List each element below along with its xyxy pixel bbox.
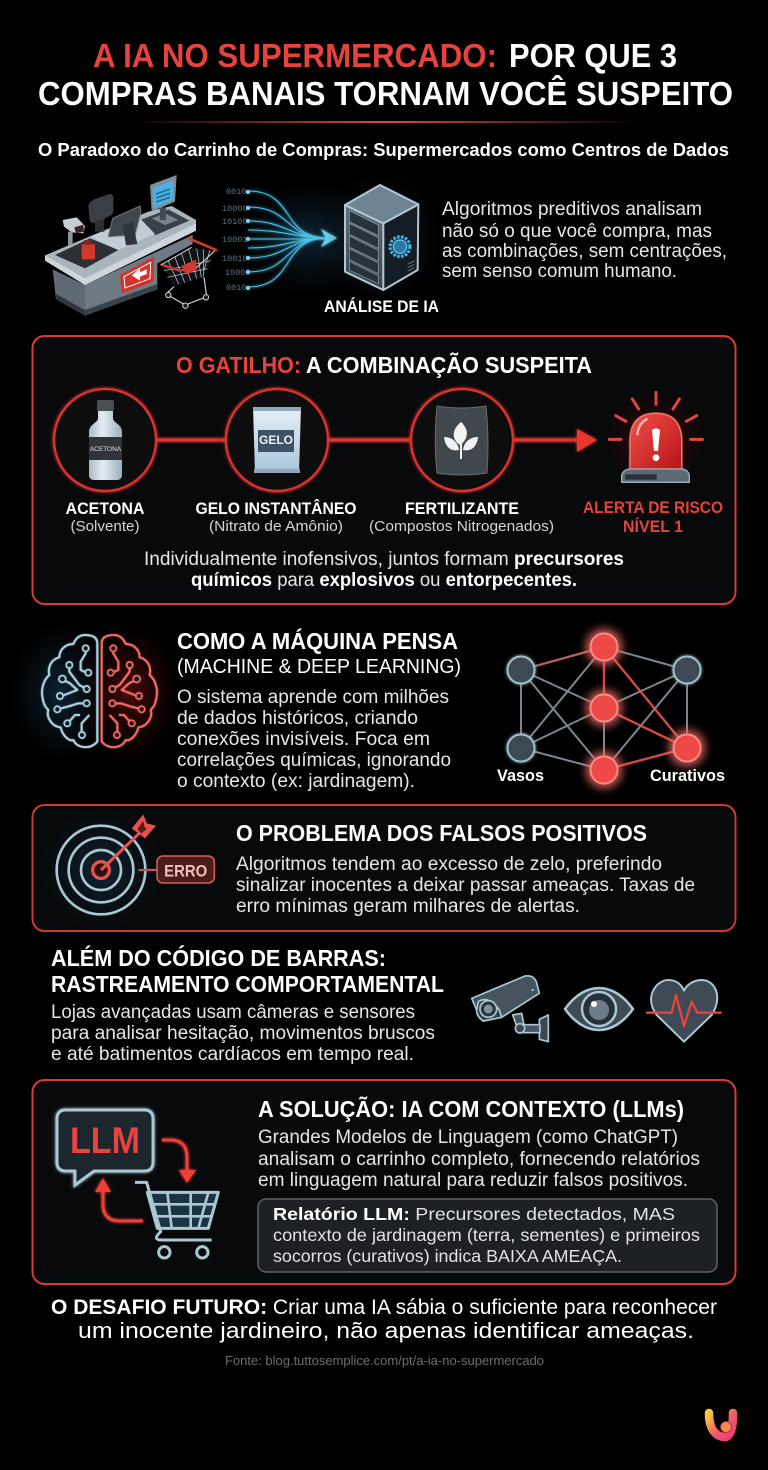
section: como a máquina pensa: (MACHINE & DEEP LEARNING) [177,655,461,678]
label: alerta de risco [583,499,723,536]
data stream arrow: 10000 [222,204,248,214]
label: fertilizante: (Compostos Nitrogenados) [369,518,554,535]
section: como a máquina pensa: o contexto (ex: jardinagem). [177,771,415,792]
section: rastreamento comportamental: Lojas avançadas usam câmeras e sensores [51,1002,415,1023]
data stream arrow: 0010 [226,187,246,197]
icon: LLM chat bubble [57,1110,153,1185]
section: rastreamento comportamental: RASTREAMENTO COMPORTAMENTAL [51,971,444,997]
label: gelo instantâneo: (Nitrato de Amônio) [209,518,343,535]
icon: acetone bottle [54,389,156,491]
icon: checkout counter with cart [45,175,216,316]
section: como a máquina pensa: conexões invisíveis. Foca em [177,729,430,750]
icon: security camera [472,976,548,1042]
panel: a solução [32,1080,736,1284]
section: como a máquina pensa [177,627,461,792]
label: acetona [66,500,145,535]
icon: logo [709,1413,733,1437]
text: combination explanation: Individualmente inofensivos, juntos formam precursores [144,549,624,570]
icon: instant ice pack: GELO [259,433,293,447]
callout: relatório LLM: Relatório LLM: Precursores detectados, MAS [273,1204,675,1224]
text: a solução: A SOLUÇÃO: IA COM CONTEXTO (LLMs) [258,1095,684,1122]
section: rastreamento comportamental [51,944,444,1065]
title: POR QUE 3 [509,37,677,74]
label: análise de IA: ANÁLISE DE IA [324,297,439,316]
text: falsos positivos: Algoritmos tendem ao excesso de zelo, preferindo [236,854,662,875]
icon: shopping cart [135,1182,218,1258]
intro text: sem senso comum humano. [442,261,677,282]
brain right half [102,635,157,747]
data stream arrow: 10010 [222,254,248,264]
label: fertilizante [369,500,554,535]
title: A IA NO SUPERMERCADO: [93,37,497,74]
section: como a máquina pensa: correlações químicas, ignorando [177,750,451,771]
icon: target with arrow [39,808,214,932]
text: falsos positivos: sinalizar inocentes a deixar passar ameaças. Taxas de [236,875,695,896]
badge: erro [157,856,214,883]
heading: o gatilho: O GATILHO: [176,352,301,378]
closing statement: um inocente jardineiro, não apenas identificar ameaças. [78,1318,694,1343]
intro text [442,199,727,282]
data stream arrow: 0010 [226,283,246,293]
title [38,37,733,112]
icon: instant ice pack [226,389,328,491]
icon: AI brain [10,622,180,762]
callout: relatório LLM [258,1199,717,1272]
text: falsos positivos: erro mínimas geram milhares de alertas. [236,896,580,917]
closing statement [51,1296,717,1343]
heading: o gatilho [176,351,592,378]
data stream arrow [222,180,380,296]
text: combination explanation: químicos para explosivos ou entorpecentes. [191,570,577,591]
intro text: não só o que você compra, mas [442,221,712,242]
badge: erro: ERRO [164,861,207,880]
label: acetona: (Solvente) [70,518,140,535]
icon: LLM chat bubble: LLM [70,1120,140,1161]
closing statement: O DESAFIO FUTURO: Criar uma IA sábia o suficiente para reconhecer [51,1296,717,1319]
icon: acetone bottle: ACETONA [90,446,122,453]
arrow: bubble to cart [162,1140,196,1183]
heading: o gatilho: A COMBINAÇÃO SUSPEITA [306,351,592,378]
intro text: Algoritmos preditivos analisam [442,199,702,220]
label: gelo instantâneo: GELO INSTANTÂNEO [196,499,357,518]
section: rastreamento comportamental: ALÉM DO CÓDIGO DE BARRAS: [51,944,386,971]
panel: falsos positivos [32,805,736,932]
section: rastreamento comportamental: e até batimentos cardíacos em tempo real. [51,1044,414,1065]
subtitle: O Paradoxo do Carrinho de Compras: Supermercados como Centros de Dados [38,139,729,160]
icon: AI server [320,172,443,305]
icon: eye [565,988,633,1030]
text: combination explanation [144,549,624,591]
node label: curativos: Curativos [650,767,725,785]
section: rastreamento comportamental: para analisar hesitação, movimentos bruscos [51,1023,435,1044]
section: como a máquina pensa: de dados históricos, criando [177,708,418,729]
brain left half [42,635,97,747]
icon: heart with pulse [646,980,722,1042]
text: a solução: em linguagem natural para reduzir falsos positivos. [258,1170,688,1191]
label: gelo instantâneo [196,499,357,535]
label: acetona: ACETONA [66,500,145,518]
data stream arrow: 10100 [222,217,248,227]
label: alerta de risco: ALERTA DE RISCO [583,499,723,517]
title: COMPRAS BANAIS TORNAM VOCÊ SUSPEITO [38,75,733,112]
node label: vasos: Vasos [497,767,544,785]
callout: relatório LLM: socorros (curativos) indica BAIXA AMEAÇA. [273,1246,622,1266]
data stream arrow: 10000 [225,268,251,278]
text: falsos positivos: O PROBLEMA DOS FALSOS POSITIVOS [236,820,647,846]
intro text: as combinações, sem centrações, [442,241,727,262]
panel: o gatilho [32,336,736,604]
text: a solução [258,1095,700,1191]
callout: relatório LLM: contexto de jardinagem (terra, sementes) e primeiros [273,1225,700,1245]
text: a solução: analisam o carrinho completo, fornecendo relatórios [258,1149,700,1170]
section: como a máquina pensa: O sistema aprende com milhões [177,687,449,708]
icon: red alarm siren [603,392,709,488]
section: como a máquina pensa: COMO A MÁQUINA PENSA [177,627,458,654]
data stream arrow: 10001 [222,235,248,245]
icon: fertilizer bag [411,389,513,491]
label: alerta de risco: NÍVEL 1 [623,517,683,536]
chart: neural network [497,634,725,785]
chain connector arrow [157,429,597,452]
source line: Fonte: blog.tuttosemplice.com/pt/a-ia-no-supermercado [225,1353,544,1368]
text: a solução: Grandes Modelos de Linguagem (como ChatGPT) [258,1127,678,1148]
text: falsos positivos [236,820,695,917]
arrow: cart to bubble [95,1178,143,1221]
label: fertilizante: FERTILIZANTE [405,500,519,518]
